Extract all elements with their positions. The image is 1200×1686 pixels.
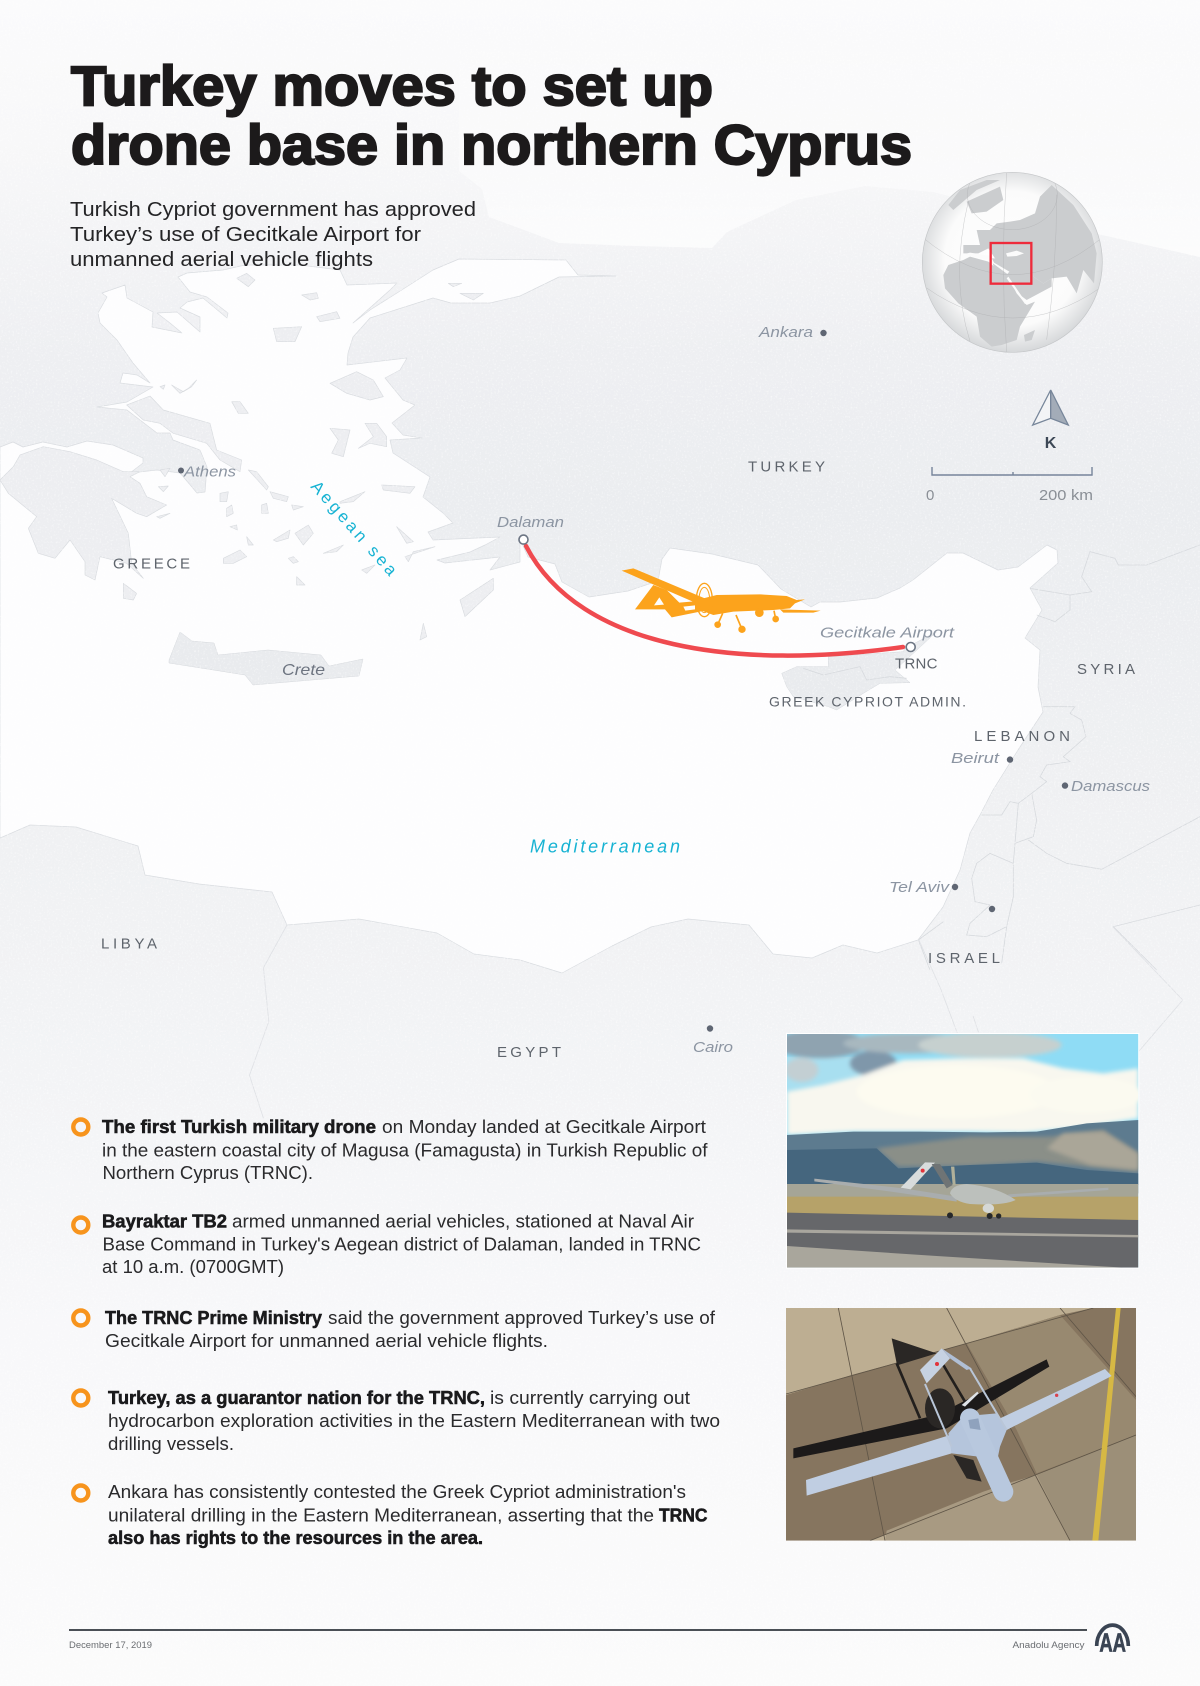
Peloponnese [0,447,167,580]
bullet 1: on Monday landed at Gecitkale Airport [382,1116,706,1137]
Aegean and Mediterranean sea [0,259,1058,973]
bullet 1: The first Turkish military drone [102,1116,376,1137]
bullet 4: drilling vessels. [108,1433,234,1454]
bullet 5: TRNC [659,1504,708,1526]
map labels: countries: LEBANON [974,728,1070,745]
scale bar: 200 km [1039,487,1093,504]
map labels: cities: Cairo [693,1039,733,1056]
globe locator [922,160,1102,352]
other borders [249,925,1183,1118]
north arrow [1033,390,1068,452]
map labels: countries: GREEK CYPRIOT ADMIN. [769,694,966,710]
bullet 1: in the eastern coastal city of Magusa (Famagusta) in Turkish Republic of [102,1140,708,1160]
subtitle: unmanned aerial vehicle flights [70,249,373,271]
bullet 5 [73,1481,708,1548]
bullet 4: hydrocarbon exploration activities in the Eastern Mediterranean with two [108,1410,720,1431]
map labels: cities: Dalaman [497,514,564,531]
footer rule [69,1629,1087,1631]
map labels: cities: Gecitkale Airport [820,624,955,642]
bullet 2 [73,1210,701,1277]
icon: Anadolu Agency logo [1097,1625,1128,1658]
bullet 5: also has rights to the resources in the area. [108,1527,483,1548]
city markers [178,330,1068,1032]
bullet 3: said the government approved Turkey’s use of [328,1307,716,1328]
drone in photo [806,1348,1112,1496]
subtitle: Turkish Cypriot government has approved [70,199,476,221]
bullet 3 [73,1307,716,1351]
bullet 2: at 10 a.m. (0700GMT) [102,1256,284,1277]
Cyprus [782,632,937,710]
globe graticule [923,160,1102,352]
Levant land details and borders [782,545,1200,970]
photo: drone from above [786,1308,1136,1541]
map labels: cities [183,324,1151,1056]
title [71,54,912,176]
map labels: countries: GREECE [113,556,190,572]
footer date: December 17, 2019 [69,1640,152,1651]
bullet 3: The TRNC Prime Ministry [105,1307,323,1328]
Black Sea [459,0,1200,257]
bullet 4: is currently carrying out [490,1387,690,1408]
Aegean land and islands [0,273,493,640]
bullet 3: Gecitkale Airport for unmanned aerial vehicle flights. [105,1330,548,1351]
bullet 2: Bayraktar TB2 [102,1210,227,1232]
icon: Anadolu Agency logo: AA [1099,1628,1126,1658]
photo: drone on runway [773,1030,1143,1269]
scale bar [926,467,1093,504]
map labels: countries [101,458,1135,1061]
map labels: countries: EGYPT [497,1044,561,1061]
icon: orange drone [622,568,821,633]
map labels: seas: Aegean sea [307,477,401,580]
bullet 1: Northern Cyprus (TRNC). [102,1162,313,1183]
bullet 1 [73,1116,708,1183]
map labels: seas [307,477,680,856]
footer agency: Anadolu Agency [1012,1640,1085,1651]
drone in photo [814,1162,1108,1219]
subtitle [70,199,476,271]
map labels: cities: Athens [183,464,237,480]
Evia [127,396,242,472]
map labels: cities: Damascus [1071,778,1151,795]
globe land [923,160,1102,352]
map labels: cities: Ankara [758,324,813,341]
map labels: cities: Beirut [951,750,1000,767]
map labels: cities: Tel Aviv [889,879,951,896]
Crete [169,632,363,685]
north arrow: K [1045,435,1057,452]
bullet 4 [73,1387,720,1454]
title: Turkey moves to set up [71,54,713,117]
map labels: seas: Mediterranean [530,836,680,856]
map labels: countries: TRNC [895,656,938,672]
locator box [991,243,1031,284]
map labels: countries: LIBYA [101,936,157,952]
bullet 2: Base Command in Turkey's Aegean district of Dalaman, landed in TRNC [102,1234,701,1254]
map labels: cities: Crete [282,662,325,679]
route endpoints [519,535,915,652]
title: drone base in northern Cyprus [71,113,912,176]
subtitle: Turkey’s use of Gecitkale Airport for [70,224,421,246]
bullet 2: armed unmanned aerial vehicles, stationed at Naval Air [232,1210,694,1232]
route arc: Dalaman to Gecitkale [526,546,903,656]
bullet 4: Turkey, as a guarantor nation for the TRNC, [108,1387,485,1408]
bullet 5: unilateral drilling in the Eastern Mediterranean, asserting that the [108,1504,654,1526]
map labels: countries: SYRIA [1077,661,1135,678]
bullet 5: Ankara has consistently contested the Greek Cypriot administration's [108,1481,686,1502]
map labels: countries: ISRAEL [928,950,1000,967]
map labels: countries: TURKEY [748,458,825,476]
scale bar: 0 [926,487,934,504]
